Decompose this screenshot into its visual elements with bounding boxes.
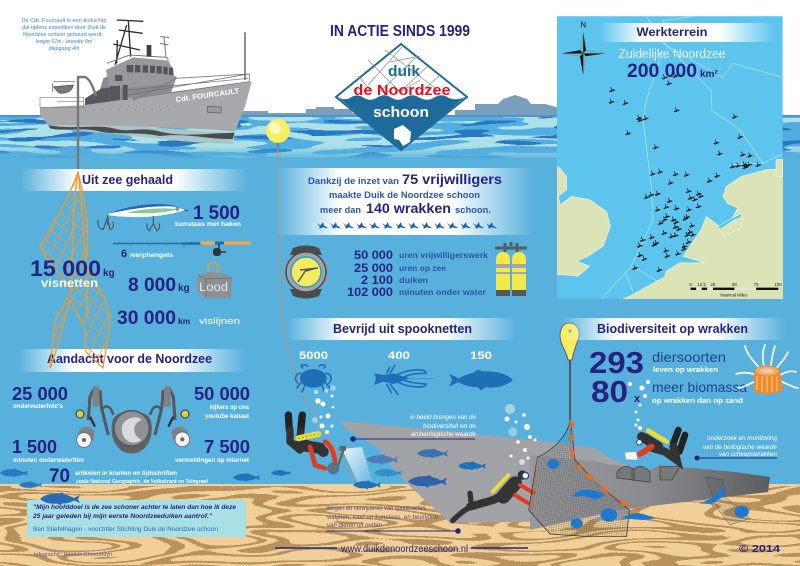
ship description: diepgang 4m — [48, 46, 80, 52]
stat: 293 diersoorten: 293 — [589, 345, 644, 380]
stat: 7 500 vermeldingen: 7 500 — [204, 437, 250, 457]
stat: 293 diersoorten — [589, 345, 726, 380]
stat: 200 000 km2: km² — [700, 69, 718, 80]
stat: 80x biomassa: meer biomassa — [652, 379, 747, 395]
diver: middle in net — [453, 470, 533, 521]
text: volunteers: meer dan — [320, 205, 361, 216]
stat: 15 000 kg visnetten — [30, 256, 115, 290]
background: sky — [0, 0, 800, 116]
quote box: 25 jaar geleden bij mijn eerste Noordzeeduiken aantrof." — [32, 513, 213, 520]
ship: Cdt. Fourcault: Cdt. FOURCAULT — [175, 86, 240, 104]
text: volunteers: 140 wrakken — [366, 200, 451, 216]
skyline — [240, 95, 560, 116]
stats: volunteer hours: duiken — [399, 276, 428, 285]
map scale bar: 25 — [710, 282, 716, 287]
stats: volunteer hours: minuten onder water — [399, 288, 486, 297]
stat: 70 artikelen: 70 — [49, 466, 70, 487]
sand in front of wreck — [450, 510, 620, 535]
stat: 15 000 kg visnetten: kg — [103, 268, 115, 279]
text: volunteers: Dankzij de inzet van — [308, 176, 399, 187]
fish school — [0, 448, 486, 506]
stat: 30 000 km vislijnen: vislijnen — [199, 316, 240, 326]
map compass: N — [580, 21, 586, 30]
copyright: © 2014 — [739, 543, 780, 555]
stat: 150 fish: 150 — [470, 350, 492, 362]
bubbles left — [312, 385, 336, 434]
wreck details — [617, 466, 680, 482]
heading: Bevrijd uit spooknetten: Bevrijd uit spooknetten — [333, 322, 472, 336]
credit: Infographic: Hendrik Gheerardyn — [34, 552, 112, 558]
callout: recovering nets: van dieren uit netten — [327, 522, 382, 529]
ship description: lengte 57m - breedte 9m — [36, 39, 92, 45]
diver: left with camera — [288, 415, 346, 474]
map compass — [562, 21, 605, 75]
icon: lure — [98, 204, 188, 231]
stat: 1 500 minuten: 1 500 — [12, 437, 57, 457]
callout: recovering nets: bergen en verwijderen van spooknetten, — [327, 505, 427, 512]
icon: dive watch — [284, 246, 330, 298]
stat: 5000 crab: 5000 — [299, 350, 328, 362]
stat: 200 000 km2: 200 000 — [627, 61, 697, 82]
icon: light beam — [342, 447, 373, 484]
stat: 6 werphengels: werphengels — [129, 253, 174, 259]
ship description: Noordzee schoon gehuurd wordt. — [23, 32, 103, 38]
callout: biodiversity imaging: biodiversiteit en de — [423, 423, 476, 430]
stat: 25 000 onderwaterfoto's: 25 000 — [12, 384, 68, 404]
banner: volunteers — [276, 168, 534, 235]
stats: volunteer hours: 102 000 — [347, 287, 393, 299]
stat: 400 lobster: 400 — [388, 350, 410, 362]
stat: 5000 crab — [296, 350, 331, 393]
ghost net on wreck — [529, 420, 750, 537]
ship: Cdt. Fourcault — [40, 20, 252, 144]
callout: recovering nets — [326, 505, 461, 534]
callout: biodiversity imaging: archeologische waarde — [411, 431, 476, 438]
text: volunteers: 75 vrijwilligers — [402, 171, 502, 187]
icon: lift bag buoy — [560, 323, 579, 420]
stat: 80x biomassa — [591, 374, 747, 409]
map scale bar: 12.5 — [697, 282, 706, 287]
quote box — [27, 500, 246, 537]
ship description — [22, 18, 106, 52]
map sea — [557, 16, 783, 299]
website: www.duikdenoordzeeschoon.nl — [340, 544, 468, 555]
heading: Uit zee gehaald: Uit zee gehaald — [82, 173, 173, 187]
callout: recovering nets: vislijnen, lood en kunstaas, en bevrijden — [327, 514, 438, 521]
heading: Aandacht voor de Noordzee: Aandacht voor de Noordzee — [47, 352, 212, 366]
stat: 80x biomassa: x — [634, 393, 641, 405]
icon: fishing rod — [113, 242, 249, 256]
text: volunteers — [308, 171, 502, 216]
stat: 25 000 onderwaterfoto's: onderwaterfoto's — [13, 404, 64, 410]
ship description: dat tijdens expedities door Duik de — [22, 25, 106, 31]
heading: Biodiversiteit op wrakken: Biodiversiteit op wrakken — [597, 322, 748, 336]
stat: 50 000 kijkers: kijkers op ons — [210, 405, 250, 411]
logo: schoon — [373, 105, 429, 121]
stats: volunteer hours — [347, 250, 489, 299]
banner: Biodiversiteit — [560, 318, 786, 340]
buoy rope — [278, 147, 358, 484]
water background — [0, 158, 800, 488]
callout: biodiversity imaging: in beeld brengen van de — [410, 414, 476, 421]
icon: orange fishing net — [40, 172, 110, 368]
banner: Werkterrein — [600, 23, 775, 42]
map scale bar: 75 — [754, 282, 759, 287]
stat: 50 000 kijkers: youtube kanaal — [205, 414, 249, 420]
sand seabed — [0, 484, 800, 566]
stat: 30 000 km vislijnen — [117, 308, 240, 329]
bubbles middle — [504, 404, 536, 465]
stat: 1 500 minuten — [12, 437, 84, 464]
callout: research monitoring: van de biologische waarde — [703, 444, 777, 451]
stat: 7 500 vermeldingen: vermeldingen op internet — [175, 458, 249, 464]
banner: Bevrijd — [287, 318, 517, 340]
ship description: De Cdt. Fourcault is een duikschip — [22, 18, 106, 24]
stat: 80x biomassa: 80 — [591, 374, 628, 409]
stat: 70 artikelen: zoals National Geographic, de Volkskrant en Telegraaf — [76, 479, 208, 485]
map scale bar — [689, 282, 782, 297]
text: Zuidelijke Noordzee: Zuidelijke Noordzee — [618, 47, 726, 61]
callout: research monitoring — [694, 435, 777, 460]
stat: 30 000 km vislijnen: 30 000 — [117, 308, 176, 329]
text: volunteers: schoon. — [455, 205, 491, 216]
stat: 50 000 kijkers: 50 000 — [194, 384, 250, 404]
stat: 70 artikelen: artikelen in kranten en tijdschriften — [75, 471, 177, 477]
stat: 70 artikelen — [49, 466, 208, 487]
banner: Aandacht — [18, 349, 246, 372]
logo: duik — [388, 63, 421, 80]
icon: lead weight — [197, 262, 232, 298]
icon: scuba tanks — [495, 242, 527, 296]
wreck bow — [340, 421, 640, 523]
icons: divers row — [317, 222, 497, 229]
diver: top with slate — [625, 430, 685, 460]
map scale bar: 0 — [689, 282, 692, 287]
sea surface waves — [0, 115, 800, 165]
stat: 293 diersoorten: leven op wrakken — [653, 367, 718, 374]
stat: 8 000 kg: kg — [178, 283, 190, 294]
stat: 15 000 kg visnetten: 15 000 — [30, 256, 101, 281]
icon: sea anemone — [736, 345, 798, 394]
tagline: IN ACTIE SINDS 1999 — [330, 23, 470, 40]
net line with davit — [78, 77, 96, 172]
stats: volunteer hours: uren op zee — [399, 264, 447, 273]
banner: Uit zee gehaald — [20, 169, 248, 191]
heading: Werkterrein: Werkterrein — [636, 27, 708, 39]
icon: lead weight: Lood — [199, 282, 228, 294]
callout: research monitoring: van scheepswrakken — [719, 451, 777, 458]
map land — [553, 159, 786, 301]
quote box: "Mijn hoofddoel is de zee schoner achter te laten dan hoe ik deze — [33, 504, 236, 511]
stat: 150 fish — [449, 350, 513, 390]
logo: de Noordzee — [354, 83, 450, 99]
stat: 6 werphengels — [121, 248, 174, 260]
map boundaries — [602, 16, 783, 299]
stat: 80x biomassa: op wrakken dan op zand — [652, 398, 743, 405]
buoy on surface — [266, 119, 290, 147]
stats: volunteer hours: 2 100 — [361, 275, 393, 287]
logo — [336, 44, 467, 150]
map scale bar: Nautical Miles — [720, 292, 747, 297]
stats: volunteer hours: 25 000 — [354, 263, 393, 275]
stat: 1 500 kunstaas — [175, 203, 241, 228]
callout: research monitoring: onderzoek en monitoring — [707, 435, 777, 442]
text: volunteers: maakte Duik de Noordzee schoon — [329, 190, 480, 201]
stat: 7 500 vermeldingen — [175, 437, 250, 464]
stat: 400 lobster — [374, 350, 433, 395]
wreck hull — [530, 455, 770, 530]
bubbles top diver — [628, 380, 650, 430]
map scale bar: 100 — [774, 282, 782, 287]
stats: volunteer hours: 50 000 — [354, 250, 393, 262]
stat: 1 500 kunstaas: 1 500 — [193, 203, 240, 224]
map wreck markers — [608, 73, 762, 272]
icon: underwater camera — [76, 387, 190, 453]
stat: 30 000 km vislijnen: km — [178, 316, 191, 326]
stat: 1 500 minuten: minuten onderwaterfilm — [13, 458, 84, 464]
stat: 8 000 kg: 8 000 — [128, 275, 176, 296]
stats: volunteer hours: uren vrijwilligerswerk — [399, 251, 489, 260]
stat: 15 000 kg visnetten: visnetten — [41, 276, 98, 290]
map scale bar: 50 — [732, 282, 737, 287]
stat: 293 diersoorten: diersoorten — [652, 349, 726, 365]
stat: 1 500 kunstaas: kunstaas met haken — [175, 221, 241, 228]
quote box: Ben Stiefelhagen - voorzitter Stichting Duik de Noordzee schoon — [33, 527, 218, 533]
callout: biodiversity imaging — [350, 414, 476, 442]
stat: 50 000 kijkers — [194, 384, 250, 420]
panel: work area map — [553, 16, 786, 301]
stat: 6 werphengels: 6 — [121, 248, 127, 260]
